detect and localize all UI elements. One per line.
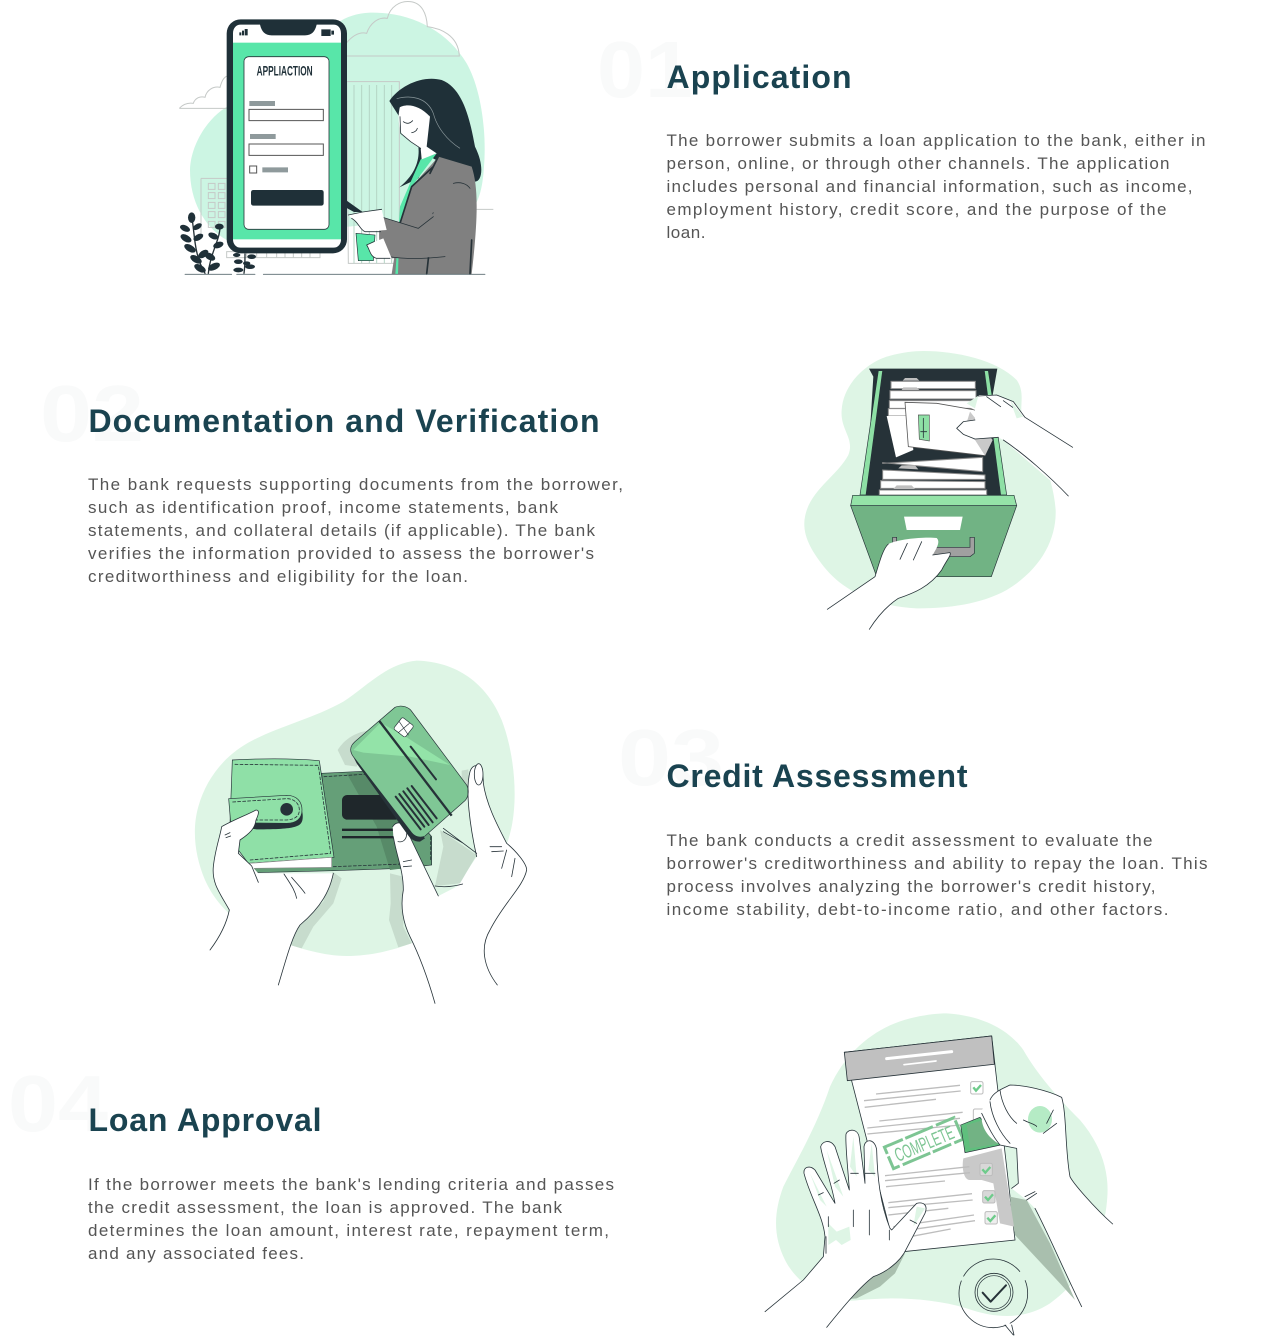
illustration: woman with phone application (179, 2, 493, 274)
right hand outlines (393, 766, 527, 1003)
drawer front lip (851, 495, 1017, 506)
wallet stitching (324, 774, 431, 867)
drawer handle (893, 537, 974, 557)
coat details (400, 157, 472, 274)
ground line (185, 273, 485, 276)
wallet cover (230, 759, 334, 863)
wallet clasp (231, 803, 303, 829)
lower hand (827, 538, 950, 630)
left hand (765, 1130, 926, 1327)
stamp: COMPLETE: COMPLETE (892, 1123, 958, 1167)
text: credit assessment description: process involves analyzing the borrower's credit history, (666, 877, 1156, 896)
text: documentation description (88, 475, 623, 586)
handheld phone (335, 201, 363, 212)
text: documentation description: statements, and collateral details (if applicable). The bank (88, 521, 596, 540)
form title: APPLIACTION (257, 62, 313, 78)
drawer label (904, 517, 963, 530)
clouds and distant scenery (179, 2, 493, 263)
credit card (351, 706, 468, 842)
panel: step 3 credit assessment (195, 661, 1208, 1003)
upper folder stack (887, 378, 977, 457)
text: application description: includes personal and financial information, such as income, (666, 177, 1192, 196)
stamping hand (981, 1085, 1113, 1307)
step number 04: 04 (8, 1059, 109, 1148)
stamp block (964, 1142, 1002, 1152)
heading: Loan Approval: Loan Approval (88, 1102, 322, 1138)
text: credit assessment description: borrower's creditworthiness and ability to repay the loan. This (666, 854, 1208, 873)
text: documentation description: creditworthiness and eligibility for the loan. (88, 567, 468, 586)
submit button (251, 190, 324, 206)
lower folder stack (879, 457, 987, 495)
panel: step 1 application (179, 2, 1205, 274)
panel: step 2 documentation and verification (40, 351, 1073, 630)
text: documentation description: such as identification proof, income statements, bank (88, 498, 558, 517)
drawer front panel (851, 506, 1017, 577)
wallet paper edges (249, 857, 332, 868)
green blouse (395, 153, 437, 274)
phone signal and battery (239, 29, 334, 36)
text: documentation description: The bank requests supporting documents from the borrower, (88, 475, 623, 494)
text: loan approval description (88, 1175, 614, 1263)
text: application description: employment history, credit score, and the purpose of the (666, 200, 1166, 219)
green screen area (233, 43, 341, 239)
text: loan approval description: If the borrower meets the bank's lending criteria and passes (88, 1175, 614, 1194)
plants (179, 212, 256, 274)
text: application description: The borrower submits a loan application to the bank, either in (666, 131, 1206, 150)
hands (348, 209, 392, 258)
heading: Documentation and Verification: Documentation and Verification (88, 403, 600, 439)
arm shadows (837, 1197, 1075, 1300)
text: application description: loan. (666, 223, 706, 242)
right hand palm and fingers behind card (393, 766, 527, 1003)
drawer interior (866, 369, 1001, 495)
drinking cup (356, 233, 375, 261)
phone body (227, 19, 347, 253)
illustration: hands with wallet and card (195, 661, 527, 1003)
panel: step 4 loan approval (8, 1013, 1113, 1335)
front folder being pulled (905, 402, 992, 456)
drawer rails (860, 371, 1007, 495)
woman coat (392, 157, 477, 274)
left hand (210, 810, 333, 985)
illustration: filing cabinet drawer (804, 351, 1073, 630)
document (844, 1036, 1015, 1252)
text: loan approval description: and any associated fees. (88, 1244, 304, 1263)
application form card (244, 57, 329, 229)
background blob (190, 13, 485, 240)
folder green label (918, 415, 929, 441)
woman hair (389, 79, 481, 187)
step number 01: 01 (597, 25, 693, 114)
checkboxes (971, 1082, 997, 1224)
background blob (195, 661, 515, 956)
text: loan approval description: the credit assessment, the loan is approved. The bank (88, 1198, 562, 1217)
wallet card slot (342, 795, 400, 838)
illustration: hands stamping document (765, 1013, 1113, 1335)
text: loan approval description: determines the loan amount, interest rate, repayment term, (88, 1221, 609, 1240)
text: credit assessment description (666, 831, 1208, 919)
form fields (249, 101, 323, 173)
text: application description: person, online, or through other channels. The application (666, 154, 1170, 173)
stamp: COMPLETE (884, 1118, 963, 1169)
stamping hand outlines (982, 1085, 1113, 1307)
background blob (776, 1013, 1108, 1316)
heading: Credit Assessment: Credit Assessment (666, 758, 968, 794)
upper hand (957, 395, 1073, 496)
text: documentation description: verifies the information provided to assess the borrower's (88, 544, 594, 563)
step number 03: 03 (618, 713, 724, 802)
text: application description (666, 131, 1206, 242)
document text lines (864, 1085, 975, 1237)
text: credit assessment description: income stability, debt-to-income ratio, and other factors. (666, 900, 1168, 919)
wallet inner panel (248, 771, 432, 873)
stamp knob (1028, 1106, 1052, 1133)
stamp shadow on document (963, 1148, 1014, 1227)
coat sleeve (379, 210, 453, 258)
face (399, 104, 437, 159)
document header (844, 1036, 994, 1081)
approval badge (959, 1259, 1028, 1335)
background blob (804, 351, 1056, 608)
step number 02: 02 (40, 369, 144, 458)
text: credit assessment description: The bank conducts a credit assessment to evaluate the (666, 831, 1152, 850)
phone screen (233, 25, 341, 248)
arm shadows (290, 872, 342, 948)
heading: Application: Application (666, 59, 852, 95)
